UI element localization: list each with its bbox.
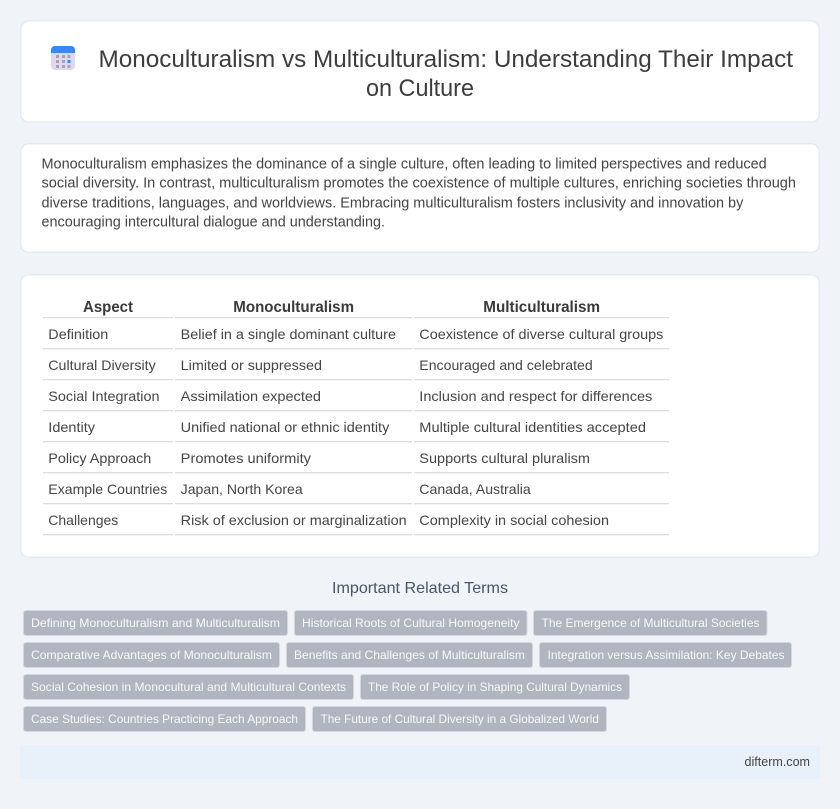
tag: Integration versus Assimilation: Key Debates xyxy=(548,648,784,662)
table header row xyxy=(83,299,600,316)
tag: Benefits and Challenges of Multiculturalism xyxy=(294,648,525,662)
row: social integration: Assimilation expected xyxy=(181,388,321,404)
tag xyxy=(312,706,606,732)
tag: Comparative Advantages of Monoculturalism xyxy=(31,648,272,662)
title: on Culture xyxy=(366,75,474,102)
row: example countries: Example Countries xyxy=(48,481,167,497)
tag xyxy=(294,610,527,636)
row: challenges: Challenges xyxy=(48,512,118,528)
row: cultural diversity: Cultural Diversity xyxy=(48,357,156,373)
icon: calendar grid xyxy=(51,46,75,70)
row: challenges: Complexity in social cohesion xyxy=(419,512,609,528)
table header row: Monoculturalism xyxy=(233,299,354,316)
panel: introduction text: Monoculturalism emphasizes the dominance of a single culture, often leading to limited perspectives and reduced xyxy=(42,156,767,172)
row: example countries: Canada, Australia xyxy=(419,481,531,497)
row: social integration: Inclusion and respect for differences xyxy=(419,388,652,404)
row: example countries: Japan, North Korea xyxy=(181,481,303,497)
row: policy approach: Supports cultural pluralism xyxy=(419,450,590,466)
tag xyxy=(24,706,306,732)
tag xyxy=(24,642,280,668)
title: Monoculturalism vs Multiculturalism: Understanding Their Impact xyxy=(98,46,793,73)
tag: Historical Roots of Cultural Homogeneity xyxy=(302,616,520,630)
row: identity: Multiple cultural identities accepted xyxy=(419,419,646,435)
panel: comparison table xyxy=(21,275,819,557)
row: definition: Definition xyxy=(48,326,108,342)
row: definition: Belief in a single dominant culture xyxy=(181,326,396,342)
row: cultural diversity xyxy=(48,357,593,373)
panel: introduction text: encouraging intercultural dialogue and understanding. xyxy=(42,215,385,231)
heading: important related terms: Important Related Terms xyxy=(332,580,508,597)
tag xyxy=(534,610,767,636)
table header row: Aspect xyxy=(83,299,134,316)
row: policy approach: Promotes uniformity xyxy=(181,450,311,466)
panel: introduction text: diverse traditions, languages, and worldviews. Embracing multiculturalism fosters inclusivity and innovation by xyxy=(42,196,744,212)
tag xyxy=(540,642,792,668)
tag: Defining Monoculturalism and Multiculturalism xyxy=(31,616,280,630)
row: cultural diversity: Limited or suppressed xyxy=(181,357,322,373)
row: policy approach xyxy=(48,450,590,466)
tag xyxy=(286,642,532,668)
tag: The Role of Policy in Shaping Cultural Dynamics xyxy=(368,680,622,694)
row: identity: Identity xyxy=(48,419,95,435)
row: example countries xyxy=(48,481,531,497)
panel: header xyxy=(21,21,819,122)
row: social integration: Social Integration xyxy=(48,388,159,404)
tag: Case Studies: Countries Practicing Each Approach xyxy=(31,712,298,726)
panel: introduction text xyxy=(21,144,819,252)
table header row: Multiculturalism xyxy=(483,299,600,316)
footer xyxy=(20,745,820,779)
row: policy approach: Policy Approach xyxy=(48,450,151,466)
row: definition xyxy=(48,326,663,342)
tag: Social Cohesion in Monocultural and Multicultural Contexts xyxy=(31,680,346,694)
row: identity xyxy=(48,419,646,435)
footer: difterm.com xyxy=(744,754,810,769)
row: challenges: Risk of exclusion or marginalization xyxy=(181,512,407,528)
panel: introduction text: social diversity. In contrast, multiculturalism promotes the coexistence of multiple cultures, enriching societies through xyxy=(42,176,796,192)
row: definition: Coexistence of diverse cultural groups xyxy=(419,326,663,342)
tag: The Emergence of Multicultural Societies xyxy=(542,616,760,630)
row: cultural diversity: Encouraged and celebrated xyxy=(419,357,593,373)
tag xyxy=(24,674,354,700)
tag: The Future of Cultural Diversity in a Globalized World xyxy=(320,712,599,726)
related terms tags xyxy=(24,610,792,732)
tag xyxy=(360,674,630,700)
title xyxy=(98,46,793,102)
row: social integration xyxy=(48,388,652,404)
row: challenges xyxy=(48,512,609,528)
tag xyxy=(24,610,288,636)
row: identity: Unified national or ethnic identity xyxy=(181,419,389,435)
